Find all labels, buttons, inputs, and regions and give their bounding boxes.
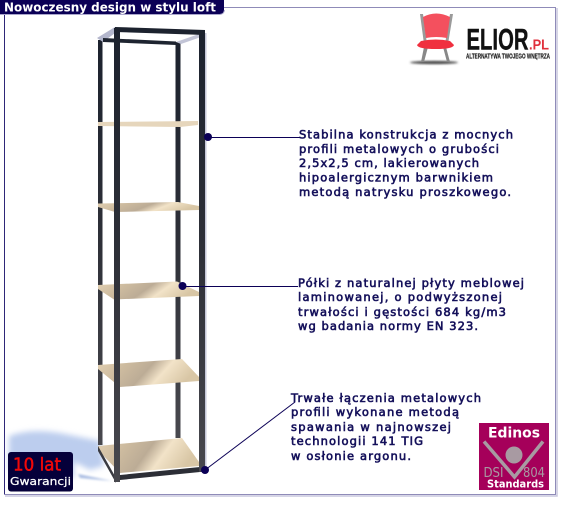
text block: welding xyxy=(290,391,481,463)
text block: welding: spawania w najnowszej xyxy=(291,420,451,434)
text block: construction: profili metalowych o grubości xyxy=(299,142,499,156)
floor shadow xyxy=(9,431,112,481)
text block: shelves: trwałości i gęstości 684 kg/m3 xyxy=(298,305,506,319)
text block: welding: w osłonie argonu. xyxy=(291,449,411,463)
logo: Elior: .PL xyxy=(529,36,549,54)
badge: Edinos standards: Standards xyxy=(487,478,544,490)
text block: construction: metodą natrysku proszkowego. xyxy=(299,185,511,199)
shelf rack illustration xyxy=(97,27,206,483)
badge: Edinos standards: 804 xyxy=(523,466,545,481)
badge: 10 year warranty: Gwarancji xyxy=(10,475,71,488)
text block: shelves: wg badania normy EN 323. xyxy=(298,319,478,333)
badge: 10 year warranty: 10 lat xyxy=(13,454,61,476)
text block: construction: Stabilna konstrukcja z mocnych xyxy=(299,128,513,142)
text block: shelves: laminowanej, o podwyższonej xyxy=(298,290,502,304)
callout line: welding xyxy=(201,402,295,474)
callout line: construction xyxy=(204,133,300,141)
wooden shelves xyxy=(98,121,198,127)
text block: construction: 2,5x2,5 cm, lakierowanych xyxy=(299,156,479,170)
top frame xyxy=(97,27,119,42)
header banner: Nowoczesny design w stylu loft xyxy=(4,0,216,14)
logo wordmark: ELIOR xyxy=(466,24,529,56)
bottom frame xyxy=(98,446,116,483)
front posts xyxy=(114,28,120,482)
badge: 10 year warranty xyxy=(8,452,73,492)
badge: Edinos standards xyxy=(479,423,549,490)
callout line: shelves xyxy=(178,282,298,290)
rear posts xyxy=(98,40,102,445)
badge: Edinos standards: Edinos xyxy=(488,426,540,442)
text block: welding: Trwałe łączenia metalowych xyxy=(290,391,481,405)
logo: Elior xyxy=(410,14,550,64)
text block: welding: technologii 141 TIG xyxy=(291,434,423,448)
text block: shelves xyxy=(298,276,524,333)
text block: welding: profili wykonane metodą xyxy=(291,405,459,419)
text block: construction: hipoalergicznym barwnikiem xyxy=(299,170,493,184)
icon: red chair xyxy=(410,14,458,64)
text block: construction xyxy=(299,128,513,199)
text block: shelves: Półki z naturalnej płyty meblowej xyxy=(298,276,524,290)
badge: Edinos standards: DSI xyxy=(484,466,504,481)
